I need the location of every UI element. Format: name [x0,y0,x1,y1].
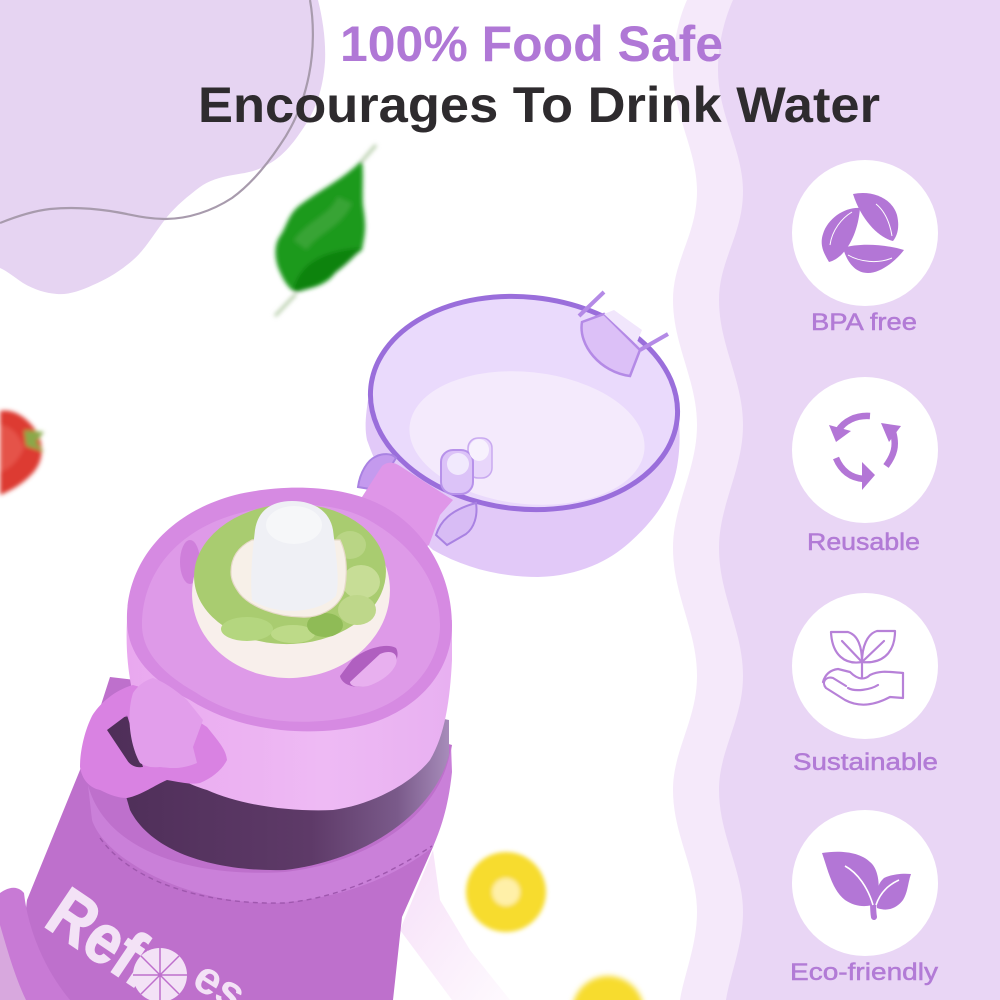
white circle [792,810,938,956]
silicone spout [251,501,338,611]
heading line 1: 100% Food Safe [340,16,723,72]
lid floor [403,360,651,516]
lid interior [360,281,688,525]
background wave: right panel [718,0,1000,1000]
grape picture disc [190,499,390,649]
label: Reusable [807,529,920,556]
lid left hinge tab [358,454,396,490]
icon: circular arrows [829,416,901,490]
background wave: light band [673,0,1000,1000]
lid rim [360,281,688,525]
feature: Reusable [792,377,938,556]
icon: two leaves [822,852,911,917]
icon: three leaves [822,193,904,273]
lid wall [366,400,680,577]
bottle lid: transparent purple [358,281,688,577]
carrying loop on cap [80,678,227,798]
bottle sleeve [0,677,510,1000]
brand logo on sleeve [44,886,242,1000]
label: Eco-friendly [790,959,938,986]
lid right hinge tab [436,503,477,545]
lid latch [579,292,668,376]
spout collar [231,540,346,617]
cap side band [127,620,452,810]
bottle cap [127,463,453,810]
right column features [790,160,938,986]
white circle [792,593,938,739]
decoration: blurred lemon slice, bottom [572,976,644,1000]
label: Sustainable [793,749,938,776]
decoration: blurred lemon slice [466,852,546,932]
white circle [792,377,938,523]
feature: BPA free [792,160,938,336]
cap top inner lighter area [142,505,440,722]
left mesh pocket [0,888,70,1000]
sleeve body [15,677,452,1000]
cap right slot [340,646,398,687]
feature: Eco-friendly [790,810,938,986]
dark glass bottle neck [104,690,449,870]
feature: Sustainable [792,593,938,776]
sleeve collar [88,745,452,903]
grapes [221,531,380,643]
cap hinge tab [355,463,453,560]
logo citrus wheel [133,948,187,1000]
cap left slot [180,540,200,584]
loop ring [80,685,227,798]
heading line 2: Encourages To Drink Water [198,77,880,133]
white circle [792,160,938,306]
icon: hand holding plant [823,631,903,705]
heading [198,16,880,133]
sleeve strap [400,850,510,1000]
top-left blob [0,0,325,294]
lid inner pegs [441,438,492,494]
spout base ring [186,499,396,685]
decoration: blurred green leaf [275,145,376,316]
label: BPA free [811,309,917,336]
cap top surface [127,488,452,731]
top-left thin curve [0,0,313,223]
decoration: blurred strawberry [0,411,44,495]
loop flap [129,678,203,768]
